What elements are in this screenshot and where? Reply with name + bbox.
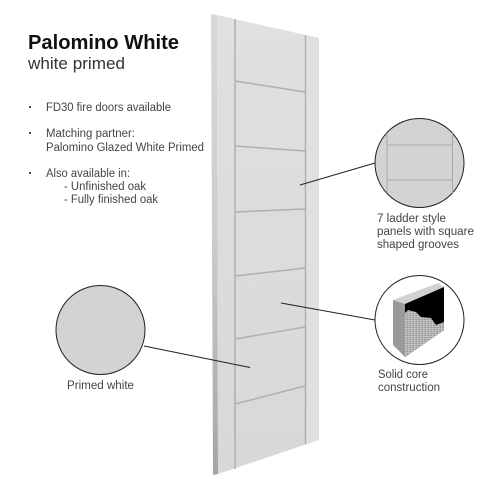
callout: solid core: Solid core xyxy=(378,369,428,381)
door grooves xyxy=(235,19,306,469)
title: Palomino White xyxy=(28,32,179,54)
callout: primed white: Primed white xyxy=(67,380,134,392)
door front face xyxy=(217,15,319,474)
callout: ladder panels: panels with square xyxy=(377,226,474,238)
feature list: - Unfinished oak xyxy=(64,181,146,193)
callout: solid core: construction xyxy=(378,382,440,394)
right stile shading xyxy=(306,35,319,444)
callout: primed white xyxy=(56,286,250,392)
callout: ladder panels xyxy=(300,118,474,251)
callout: ladder panels: shaped grooves xyxy=(377,239,459,251)
feature list: Also available in: xyxy=(46,168,130,180)
feature list: - Fully finished oak xyxy=(64,194,158,206)
callout: ladder panels: 7 ladder style xyxy=(377,213,446,225)
feature list: FD30 fire doors available xyxy=(46,102,171,114)
door side edge xyxy=(211,14,218,475)
icon: door core cross-section xyxy=(393,283,444,357)
feature list: Matching partner: xyxy=(46,128,135,140)
feature list xyxy=(29,102,204,206)
callout: solid core xyxy=(281,276,464,394)
subtitle: white primed xyxy=(27,54,125,73)
feature list: Palomino Glazed White Primed xyxy=(46,142,204,154)
door illustration xyxy=(211,14,319,475)
